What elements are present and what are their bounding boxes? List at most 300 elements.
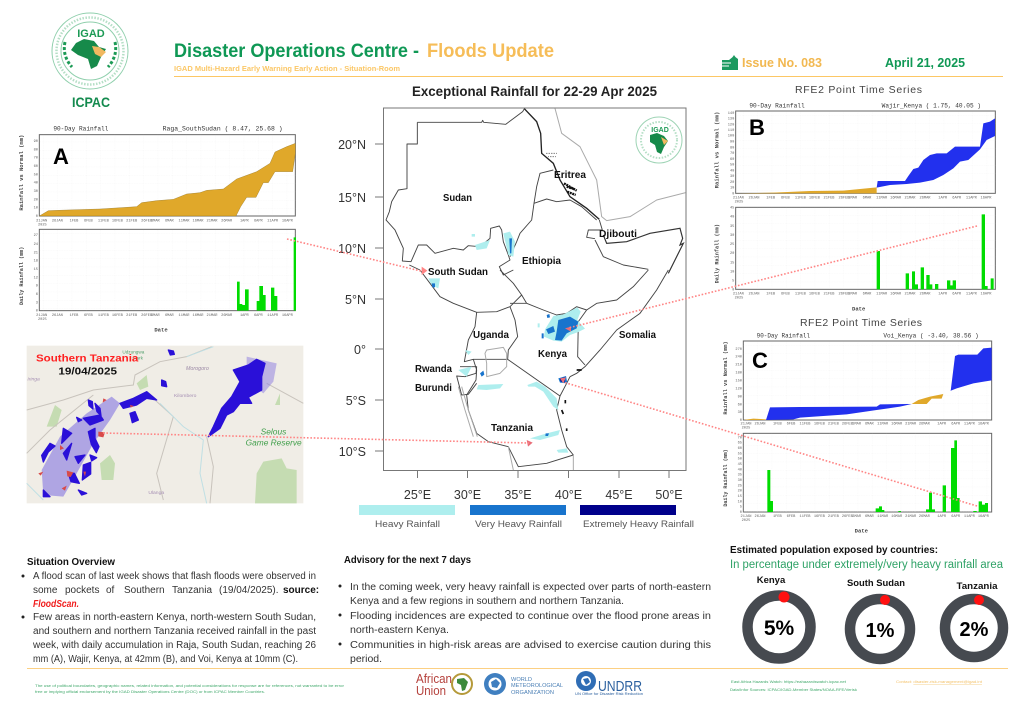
map longitude labels: 35°E	[504, 488, 532, 502]
chart C: Voi Kenya: 6FEB	[787, 423, 796, 427]
chart B: Wajir Kenya: 120	[728, 123, 734, 127]
chart C: Voi Kenya: 65	[738, 442, 742, 446]
title	[174, 40, 554, 62]
chart C: Voi Kenya: 21FEB	[828, 423, 840, 427]
text block: advisory: Kenya and a few regions in southern and northern Tanzania.	[350, 596, 624, 607]
chart C: Voi Kenya: 90	[738, 395, 742, 399]
chart A: Raga South Sudan: 6MAR	[165, 219, 175, 223]
logo: IGAD ICPAC	[52, 13, 128, 110]
chart C: Voi Kenya	[722, 333, 992, 534]
text block: situation overview: and southern and northern Tanzania received rainfall in the past	[33, 626, 316, 637]
arrow: C to Voi	[563, 382, 977, 506]
chart C: Voi Kenya: 16FEB	[814, 515, 826, 519]
chart B: Wajir Kenya: 10	[730, 270, 734, 274]
chart A: Raga South Sudan: 12	[34, 276, 38, 280]
chart B: Wajir Kenya: 15	[730, 261, 734, 265]
subtitle: IGAD Multi-Hazard Early Warning Early Action - Situation-Room	[174, 64, 400, 73]
chart A: Raga South Sudan: 15	[34, 268, 38, 272]
map country labels	[415, 169, 656, 434]
satellite flood map: Southern Tanzania	[27, 346, 303, 503]
chart C: Voi Kenya: 50	[738, 458, 742, 462]
donut: Kenya: Kenya	[757, 575, 786, 586]
map country labels: Djibouti	[599, 228, 637, 240]
chart A: Raga South Sudan: 24	[34, 243, 39, 247]
map terrain: Kilombero	[174, 393, 197, 399]
flood map place labels: Game Reserve	[246, 437, 302, 447]
chart B: Wajir Kenya: 25	[730, 243, 734, 247]
chart A: Raga South Sudan: 0	[36, 215, 38, 219]
chart C: Voi Kenya: 3MAR	[852, 515, 862, 519]
chart C: Voi Kenya: 30	[738, 479, 742, 483]
chart C: Voi Kenya: 1APR	[937, 423, 947, 427]
donut: Kenya	[748, 575, 810, 658]
map country labels: South Sudan	[428, 266, 488, 278]
chart B: Wajir Kenya	[714, 103, 995, 312]
map country labels: Kenya	[538, 348, 567, 360]
chart C: Voi Kenya: 21MAR	[905, 515, 917, 519]
map latitude labels: 5°S	[346, 394, 366, 408]
logo: African Union	[416, 671, 472, 698]
chart C: Voi Kenya: Date	[855, 527, 869, 534]
chart A: Raga South Sudan: 1FEB	[70, 314, 79, 318]
chart B: Wajir Kenya: 16FEB	[809, 293, 821, 297]
flood map place labels	[36, 354, 302, 447]
map latitude labels: 10°N	[338, 242, 366, 256]
text block: advisory: period.	[350, 654, 382, 665]
chart C: Voi Kenya: 150	[735, 380, 742, 384]
text block: advisory: Flooding incidences are expected to continue over the flood prone areas in	[350, 611, 711, 622]
map: exceptional rainfall	[338, 108, 686, 502]
chart B: Wajir Kenya: 16FEB	[809, 197, 821, 201]
map terrain: Iringa	[27, 377, 40, 383]
footer disclaimer: free or implying official endorsement by the IGAD Disaster Operations Centre (DOC) or from ICPAC Member Countries.	[35, 689, 265, 694]
chart B: Wajir Kenya: 16APR	[981, 197, 992, 201]
chart C: Voi Kenya: 16FEB	[814, 423, 826, 427]
footer links: East Africa Hazards Watch: https://eahazardswatch.icpac.net	[731, 680, 847, 684]
chart A: Raga South Sudan: 21	[34, 251, 39, 255]
chart C: Voi Kenya: 11MAR	[877, 423, 889, 427]
chart C: Voi Kenya: 11FEB	[800, 423, 811, 427]
map longitude labels: 25°E	[404, 488, 431, 502]
chart B: Wajir Kenya: 140	[728, 112, 734, 116]
chart B: Wajir Kenya: 11FEB	[795, 293, 807, 297]
chart C: Voi Kenya: 21JAN	[741, 515, 751, 519]
chart B: Wajir Kenya: Wajir_Kenya ( 1.75, 40.05 )	[882, 103, 981, 110]
title chart B: RFE2 Point Time Series	[795, 84, 922, 96]
chart C: Voi Kenya: 0	[740, 419, 742, 423]
title: Disaster Operations Centre -	[174, 40, 424, 62]
text block: advisory	[338, 582, 711, 665]
logo: UNDRR: UN Office for Disaster Risk Reduction	[575, 692, 643, 696]
chart A: Raga South Sudan: 6APR	[254, 314, 264, 318]
chart B: Wajir Kenya: 11APR	[966, 197, 978, 201]
chart B: Wajir Kenya: 21JAN	[733, 197, 744, 201]
chart C: Voi Kenya: 25	[738, 484, 742, 488]
chart B: Wajir Kenya: Daily Rainfall (mm)	[714, 224, 721, 283]
heading: population exposed: Estimated population exposed by countries:	[730, 545, 938, 556]
chart C: Voi Kenya: 26JAN	[755, 515, 765, 519]
map country labels: Somalia	[619, 329, 656, 341]
chart C: Voi Kenya: 70	[738, 436, 742, 440]
chart C: Voi Kenya: 6MAR	[865, 515, 875, 519]
map latitude labels: 20°N	[338, 138, 366, 152]
map latitude labels: 0°	[354, 343, 366, 357]
chart A: Raga South Sudan: 60	[34, 165, 38, 169]
map axis ticks	[375, 144, 669, 478]
chart C: Voi Kenya: 6APR	[951, 515, 961, 519]
chart B: Wajir Kenya: Rainfall vs Normal (mm)	[714, 112, 721, 188]
chart B: Wajir Kenya: 6FEB	[781, 197, 791, 201]
chart B: Wajir Kenya: 1FEB	[766, 197, 776, 201]
chart B: Wajir Kenya: 11MAR	[876, 197, 888, 201]
chart A: Raga South Sudan: 21JAN	[36, 219, 47, 223]
chart C: Voi Kenya: 270	[735, 348, 742, 352]
map country labels: Sudan	[443, 192, 472, 204]
chart A: Raga South Sudan: 6FEB	[84, 219, 94, 223]
flood map place labels: Southern Tanzania	[36, 354, 139, 365]
donut: South Sudan: South Sudan	[847, 578, 905, 589]
chart A: Raga South Sudan: 18	[34, 260, 38, 264]
text block: situation overview: of	[106, 585, 115, 596]
map country labels: Eritrea	[554, 169, 586, 181]
chart B: Wajir Kenya: 6APR	[952, 197, 962, 201]
chart C: Voi Kenya: 16MAR	[891, 423, 903, 427]
map longitude labels: 45°E	[605, 488, 633, 502]
chart C: Voi Kenya: 45	[738, 463, 742, 467]
map small IGAD logo	[636, 117, 682, 163]
chart B: Wajir Kenya: 26MAR	[920, 197, 931, 201]
flood speckle	[42, 397, 120, 497]
map legend: Very Heavy Rainfall	[475, 519, 562, 530]
map small IGAD logo: IGAD	[651, 127, 669, 134]
text block: situation overview: week, with daily accumulation in Raja, South Sudan, reaching 26	[32, 640, 316, 651]
chart A: Raga South Sudan: 21FEB	[126, 314, 138, 318]
chart B: Wajir Kenya: 110	[728, 129, 734, 133]
chart B: Wajir Kenya: 0	[732, 192, 734, 196]
chart C: Voi Kenya: 15	[738, 495, 742, 499]
chart A: Raga South Sudan: 21JAN	[36, 314, 47, 318]
logo: IGAD ICPAC: IGAD	[77, 28, 105, 40]
chart C: Voi Kenya: 6MAR	[865, 423, 875, 427]
chart B: Wajir Kenya: 5	[732, 279, 734, 283]
chart B: Wajir Kenya: 16APR	[981, 293, 992, 297]
text block: situation overview: Few areas in north-eastern Kenya, north-western South Sudan,	[33, 612, 316, 623]
arrow: flood map to Tanzania	[103, 433, 529, 443]
chart A: Raga South Sudan: 26JAN	[52, 219, 63, 223]
chart A: Raga South Sudan: 90	[34, 140, 38, 144]
chart A: Raga South Sudan: 1FEB	[70, 219, 79, 223]
chart C: Voi Kenya: 11FEB	[800, 515, 811, 519]
chart B: Wajir Kenya: 11APR	[966, 293, 978, 297]
chart C: Voi Kenya: 210	[735, 364, 742, 368]
chart C: Voi Kenya: 180	[735, 372, 742, 376]
chart A: Raga South Sudan: 30	[34, 190, 38, 194]
chart B: Wajir Kenya: 35	[730, 225, 734, 229]
text block: situation overview: (19/04/2025).	[219, 585, 278, 596]
chart C: Voi Kenya: 30	[738, 411, 742, 415]
chart C: Voi Kenya: 20	[738, 490, 742, 494]
map country labels: Burundi	[415, 382, 452, 394]
chart B: Wajir Kenya: 21FEB	[824, 197, 835, 201]
chart C: Voi Kenya: 26MAR	[919, 515, 931, 519]
map longitude labels: 40°E	[555, 488, 582, 502]
chart C: Voi Kenya: 11APR	[964, 423, 976, 427]
chart B: Wajir Kenya: 26MAR	[920, 293, 931, 297]
chart C: Voi Kenya: 90-Day Rainfall	[757, 333, 810, 340]
logo: IGAD ICPAC: ICPAC	[72, 94, 110, 110]
chart C: Voi Kenya: 21JAN	[741, 423, 751, 427]
chart C: Voi Kenya: 26MAR	[919, 423, 931, 427]
chart A: Raga South Sudan: 2025	[38, 223, 47, 227]
chart C: Voi Kenya: 1FEB	[773, 423, 783, 427]
text block: advisory: north-eastern Kenya.	[350, 625, 449, 636]
text block: advisory: In the coming week, very heavy rainfall is expected over parts of north-eastern	[350, 582, 711, 593]
chart A: Raga South Sudan: 26FEB	[141, 219, 153, 223]
chart B: Wajir Kenya: 90-Day Rainfall	[749, 103, 805, 110]
chart A: Raga South Sudan: 6APR	[254, 219, 264, 223]
map country labels: Tanzania	[491, 422, 533, 434]
chart C: Voi Kenya: 0	[740, 511, 742, 515]
flood extent	[42, 350, 265, 497]
chart B: Wajir Kenya: 3MAR	[848, 293, 858, 297]
map terrain: Udzungwa	[122, 349, 145, 354]
chart C: Voi Kenya: 11APR	[964, 515, 976, 519]
chart A: Raga South Sudan: 11MAR	[179, 314, 190, 318]
chart A: Raga South Sudan: 16APR	[282, 314, 294, 318]
flood map place labels: Selous	[261, 427, 287, 437]
logo: UNDRR: UNDRR	[598, 678, 642, 695]
chart C: Voi Kenya: 11MAR	[877, 515, 889, 519]
chart C: Voi Kenya: 6FEB	[787, 515, 796, 519]
map title: Exceptional Rainfall for 22-29 Apr 2025	[412, 84, 657, 99]
chart B: Wajir Kenya: 3MAR	[848, 197, 858, 201]
chart C: Voi Kenya: 35	[738, 474, 742, 478]
chart B: Wajir Kenya: 70	[730, 152, 734, 156]
subheading: percentage: In percentage under extremely/very heavy rainfall area	[730, 559, 1004, 571]
chart B: Wajir Kenya: 90	[730, 141, 734, 145]
donut: Tanzania	[945, 581, 1003, 657]
chart A: Raga South Sudan: 16MAR	[193, 314, 204, 318]
text block: situation overview	[22, 571, 319, 665]
chart A: Raga South Sudan: Raga_SouthSudan ( 8.47, 25.68 )	[163, 126, 283, 133]
chart C: Voi Kenya: 40	[738, 468, 742, 472]
chart B: Wajir Kenya: 1FEB	[766, 293, 776, 297]
text block: situation overview: mm (A), Wajir, Kenya, at 42mm (B), and Voi, Kenya at 10mm (C).	[33, 654, 298, 665]
chart C: Voi Kenya: 60	[738, 403, 742, 407]
donut: Kenya: 5%	[764, 617, 794, 640]
chart B: Wajir Kenya: 26FEB	[839, 293, 850, 297]
chart A: Raga South Sudan: 10	[34, 207, 38, 211]
chart A: Raga South Sudan: 20	[34, 198, 38, 202]
map longitude labels: 30°E	[454, 488, 481, 502]
chart B: Wajir Kenya: 11MAR	[876, 293, 888, 297]
chart B: Wajir Kenya: 20	[730, 252, 734, 256]
chart C: Voi Kenya: 26FEB	[842, 515, 854, 519]
map terrain: Park	[133, 355, 144, 360]
chart B: Wajir Kenya: 80	[730, 146, 734, 150]
text block: situation overview: pockets	[65, 585, 99, 596]
map country labels: Ethiopia	[522, 255, 561, 267]
chart B: Wajir Kenya: 26JAN	[749, 197, 759, 201]
chart A: Raga South Sudan: 40	[34, 182, 38, 186]
flood map place labels: 19/04/2025	[58, 366, 117, 377]
chart A: Raga South Sudan: Rainfall vs Normal (mm)	[18, 135, 25, 211]
text block: situation overview: FloodScan.	[33, 599, 79, 610]
text block: situation overview: A flood scan of last week shows that flash floods were observed in	[33, 571, 316, 582]
donut: South Sudan	[847, 578, 910, 659]
chart C: Voi Kenya: Voi_Kenya ( -3.40, 38.56 )	[883, 333, 979, 340]
chart A: Raga South Sudan: 11FEB	[98, 219, 110, 223]
chart B: Wajir Kenya: 21JAN	[733, 293, 744, 297]
logo: WMO: METEOROLOGICAL	[511, 683, 564, 689]
chart B: Wajir Kenya: 0	[732, 288, 734, 292]
chart B: Wajir Kenya: 21MAR	[905, 293, 916, 297]
chart A: Raga South Sudan: 1APR	[240, 314, 250, 318]
heading: Situation Overview: Situation Overview	[27, 557, 115, 568]
chart A: Raga South Sudan: 11APR	[267, 219, 279, 223]
donut: Tanzania: Tanzania	[956, 581, 998, 592]
map longitude labels	[404, 488, 683, 502]
arrow: B to Wajir	[568, 226, 977, 328]
chart C: Voi Kenya: 10	[738, 500, 742, 504]
chart C: Voi Kenya: 240	[735, 356, 742, 360]
chart A: Raga South Sudan: 16FEB	[112, 219, 124, 223]
footer contact: Contact: disaster-risk-management@igad.int	[896, 680, 983, 684]
chart C: Voi Kenya: 60	[738, 447, 742, 451]
chart B: Wajir Kenya: 11FEB	[795, 197, 807, 201]
chart C: Voi Kenya: 16APR	[978, 515, 990, 519]
chart C: Voi Kenya: 26JAN	[755, 423, 765, 427]
map latitude labels	[338, 138, 366, 459]
chart label C: C	[752, 348, 768, 373]
chart C: Voi Kenya: 16MAR	[891, 515, 903, 519]
chart A: Raga South Sudan: Date	[154, 327, 168, 334]
chart A: Raga South Sudan: 11FEB	[98, 314, 110, 318]
chart A: Raga South Sudan: 11APR	[267, 314, 279, 318]
chart C: Voi Kenya: 6APR	[951, 423, 961, 427]
chart C: Voi Kenya: 120	[735, 387, 742, 391]
icon: issue flood house	[722, 55, 738, 70]
chart B: Wajir Kenya: 130	[728, 118, 734, 122]
chart B: Wajir Kenya: 50	[730, 164, 734, 168]
chart A: Raga South Sudan: 27	[34, 234, 38, 238]
map legend: Heavy Rainfall	[375, 519, 440, 530]
text block: situation overview: Tanzania	[172, 585, 212, 596]
chart B: Wajir Kenya: 16MAR	[890, 197, 902, 201]
text block: advisory: Communities in high-risk areas are advised to exercise caution during this	[350, 640, 711, 651]
chart A: Raga South Sudan: 6	[36, 293, 38, 297]
chart C: Voi Kenya: 2025	[742, 519, 750, 523]
footer disclaimer	[35, 683, 345, 694]
chart label B: B	[749, 115, 765, 140]
arrow: A to South Sudan	[287, 239, 425, 272]
chart A: Raga South Sudan: 6MAR	[165, 314, 175, 318]
rainfall patches	[428, 278, 585, 453]
chart A: Raga South Sudan: Daily Rainfall (mm)	[18, 247, 25, 305]
chart A: Raga South Sudan: 90-Day Rainfall	[53, 126, 109, 133]
logo: WMO	[484, 673, 564, 696]
chart A: Raga South Sudan: 50	[34, 173, 38, 177]
map north part borders	[386, 108, 686, 275]
chart A: Raga South Sudan: 2025	[38, 318, 47, 322]
map south part borders	[420, 270, 668, 470]
text block: situation overview: some	[33, 585, 58, 596]
chart B: Wajir Kenya: 30	[730, 234, 734, 238]
chart A: Raga South Sudan: 21MAR	[207, 314, 218, 318]
map latitude labels: 15°N	[338, 191, 366, 205]
chart C: Voi Kenya: 21MAR	[905, 423, 917, 427]
chart A: Raga South Sudan: 6FEB	[84, 314, 94, 318]
chart B: Wajir Kenya: 20	[730, 181, 734, 185]
chart B: Wajir Kenya: 40	[730, 216, 734, 220]
map latitude labels: 5°N	[345, 293, 366, 307]
heading: Advisory: Advisory for the next 7 days	[344, 555, 471, 566]
logo: African Union: African	[416, 671, 452, 686]
logo: WMO: ORGANIZATION	[511, 690, 554, 696]
chart B: Wajir Kenya: 60	[730, 158, 734, 162]
chart B: Wajir Kenya: 30	[730, 175, 734, 179]
chart C: Voi Kenya: Daily Rainfall (mm)	[722, 449, 729, 507]
text block: situation overview: Southern	[124, 585, 165, 596]
chart A: Raga South Sudan: 3MAR	[151, 219, 161, 223]
map legend	[359, 505, 694, 530]
chart B: Wajir Kenya: 26JAN	[749, 293, 759, 297]
chart C: Voi Kenya: 26FEB	[842, 423, 854, 427]
chart A: Raga South Sudan: 3	[36, 301, 38, 305]
chart C: Voi Kenya: 3MAR	[852, 423, 862, 427]
chart A: Raga South Sudan: 1APR	[240, 219, 250, 223]
chart B: Wajir Kenya: 6MAR	[863, 197, 872, 201]
footer disclaimer: The use of political boundaries, geographic names, related information, and potential considerations for response are for references, not warranted to be error	[35, 683, 345, 688]
issue number: Issue No. 083	[742, 56, 822, 70]
logo: WMO: WORLD	[511, 677, 532, 683]
chart B: Wajir Kenya: 6APR	[952, 293, 962, 297]
map country labels: Rwanda	[415, 363, 452, 375]
chart C: Voi Kenya: 5	[740, 506, 742, 510]
chart B: Wajir Kenya: 21MAR	[905, 197, 916, 201]
chart A: Raga South Sudan: 3MAR	[151, 314, 161, 318]
map terrain: Morogoro	[186, 366, 209, 372]
chart C: Voi Kenya: 16APR	[978, 423, 990, 427]
chart A: Raga South Sudan	[18, 126, 296, 334]
chart A: Raga South Sudan: 80	[34, 148, 38, 152]
chart A: Raga South Sudan: 26MAR	[221, 219, 233, 223]
chart B: Wajir Kenya: 26FEB	[839, 197, 850, 201]
chart B: Wajir Kenya: 6FEB	[781, 293, 791, 297]
chart A: Raga South Sudan: 26JAN	[52, 314, 63, 318]
chart B: Wajir Kenya: 21FEB	[824, 293, 835, 297]
map country labels: Uganda	[473, 329, 509, 341]
logo: African Union: Union	[416, 683, 446, 698]
chart C: Voi Kenya: 1APR	[937, 515, 947, 519]
chart A: Raga South Sudan: 16MAR	[193, 219, 204, 223]
map terrain	[27, 347, 303, 503]
title chart C: RFE2 Point Time Series	[800, 317, 922, 329]
map terrain: Ulanga	[148, 490, 164, 496]
chart B: Wajir Kenya: 10	[730, 187, 734, 191]
title: Floods Update	[427, 40, 554, 62]
issue date: April 21, 2025	[885, 56, 965, 70]
chart A: Raga South Sudan: 70	[34, 157, 38, 161]
map legend: Extremely Heavy Rainfall	[583, 519, 694, 530]
chart C: Voi Kenya: 55	[738, 452, 742, 456]
chart B: Wajir Kenya: 6MAR	[863, 293, 872, 297]
footer links: Data/Infor Sources: ICPAC/IGAD-Member States/NOAA-RFE/Verisk	[730, 688, 857, 692]
chart A: Raga South Sudan: 9	[36, 285, 38, 289]
chart B: Wajir Kenya: 1APR	[938, 197, 948, 201]
logo: UNDRR	[575, 671, 643, 696]
chart B: Wajir Kenya: 16MAR	[890, 293, 902, 297]
